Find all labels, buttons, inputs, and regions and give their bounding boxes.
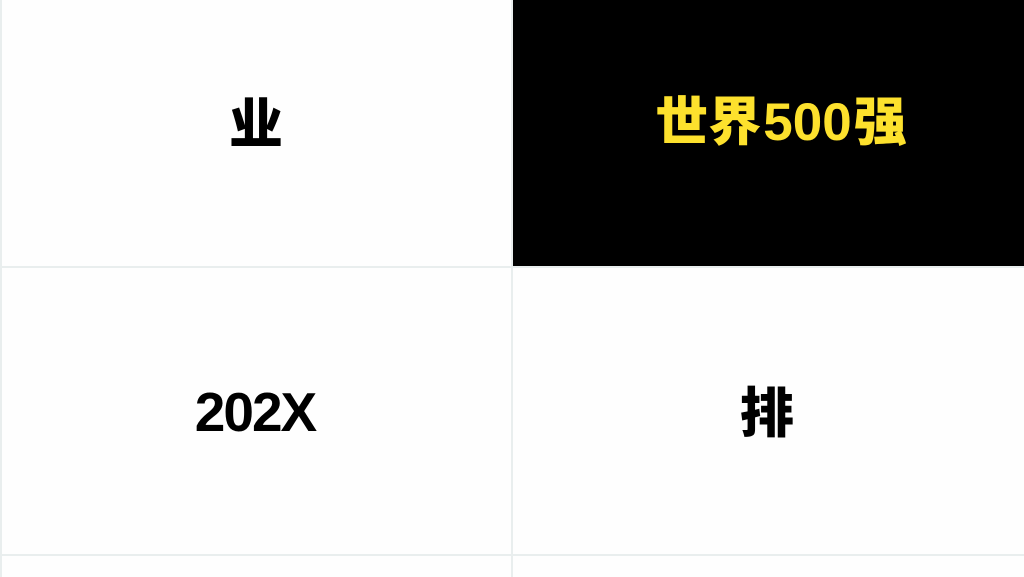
panel: year 202X [2,268,511,554]
panel: lower right partial cell [513,556,1024,577]
panel: black highlight [513,0,1024,266]
panel: character 业 [2,0,511,266]
text: 世界500强: 世界500强 [655,93,907,152]
panel: lower left partial cell [2,556,511,577]
panel: character 排 [513,268,1024,554]
text: 业: 业 [229,95,283,155]
text: 202X: 202X [195,381,315,443]
text: 排: 排 [740,384,794,444]
